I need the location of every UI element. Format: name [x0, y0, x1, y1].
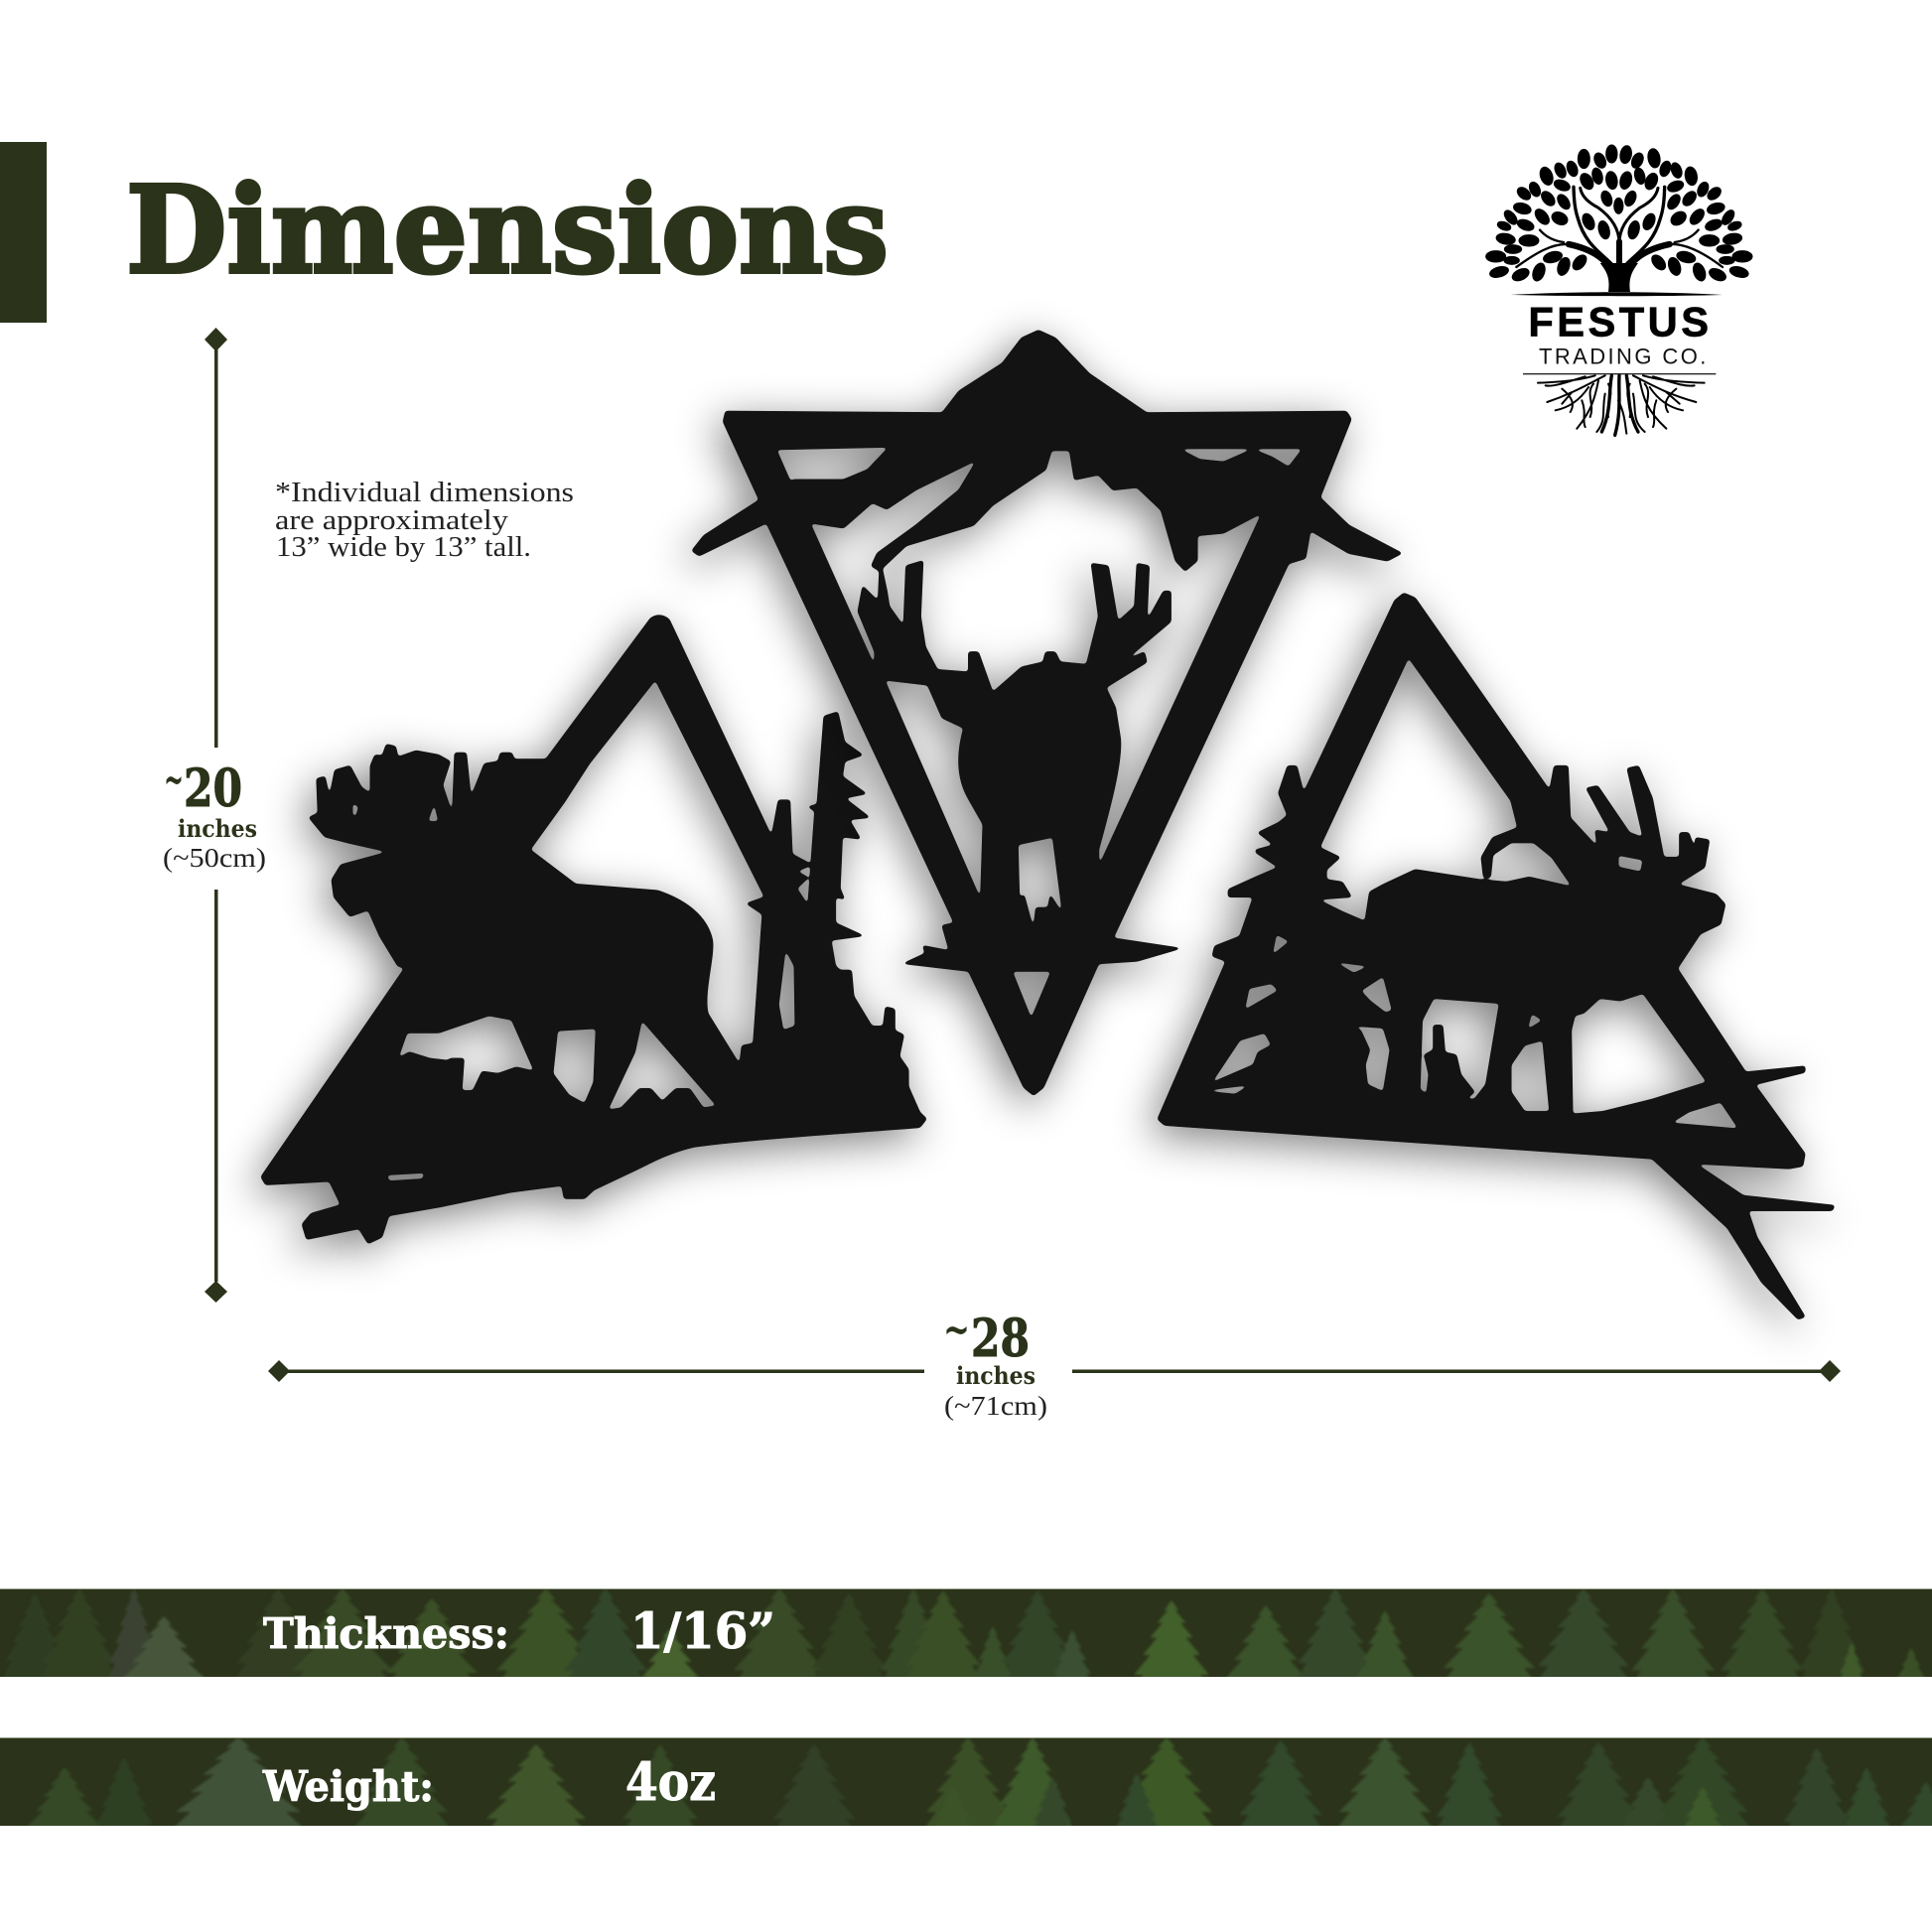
height label: 20 — [184, 759, 242, 819]
panel: moose triangle — [261, 616, 926, 1244]
width label: (~71cm) — [944, 1391, 1047, 1421]
logo: Festus Trading Co. — [1486, 145, 1752, 435]
title: Dimensions — [126, 159, 889, 301]
logo name: FESTUS — [1528, 298, 1709, 345]
label: weight: Weight: — [262, 1762, 434, 1811]
logo root line — [1523, 373, 1716, 374]
panel: deer inverted triangle — [692, 331, 1402, 1095]
note: individual dimensions: 13” wide by 13” tall. — [276, 532, 531, 563]
note: individual dimensions: are approximately — [275, 505, 508, 536]
accent bar — [0, 142, 47, 323]
height label: ~ — [164, 755, 184, 805]
logo tree — [1516, 187, 1723, 292]
panel: weight bar — [0, 1737, 1932, 1826]
logo subtitle: TRADING CO. — [1539, 345, 1706, 369]
note: individual dimensions — [275, 478, 574, 563]
vertical dimension line — [205, 328, 227, 1303]
height label — [163, 755, 266, 873]
panel: elk triangle — [1158, 593, 1835, 1319]
value: weight: 4oz — [625, 1752, 716, 1813]
horizontal dimension line — [268, 1360, 1841, 1382]
logo leaves — [1486, 145, 1752, 283]
label: thickness: Thickness: — [263, 1609, 509, 1658]
panel: thickness bar — [0, 1588, 1932, 1677]
width label — [943, 1305, 1047, 1421]
note: individual dimensions: *Individual dimensions — [275, 478, 574, 508]
width label: inches — [956, 1361, 1035, 1390]
height label: (~50cm) — [163, 843, 266, 873]
logo roots — [1538, 375, 1705, 435]
logo ground line — [1511, 292, 1723, 296]
value: thickness: 1/16” — [630, 1601, 775, 1660]
height label: inches — [178, 814, 257, 843]
width label: 28 — [971, 1309, 1030, 1369]
width label: ~ — [943, 1305, 970, 1355]
